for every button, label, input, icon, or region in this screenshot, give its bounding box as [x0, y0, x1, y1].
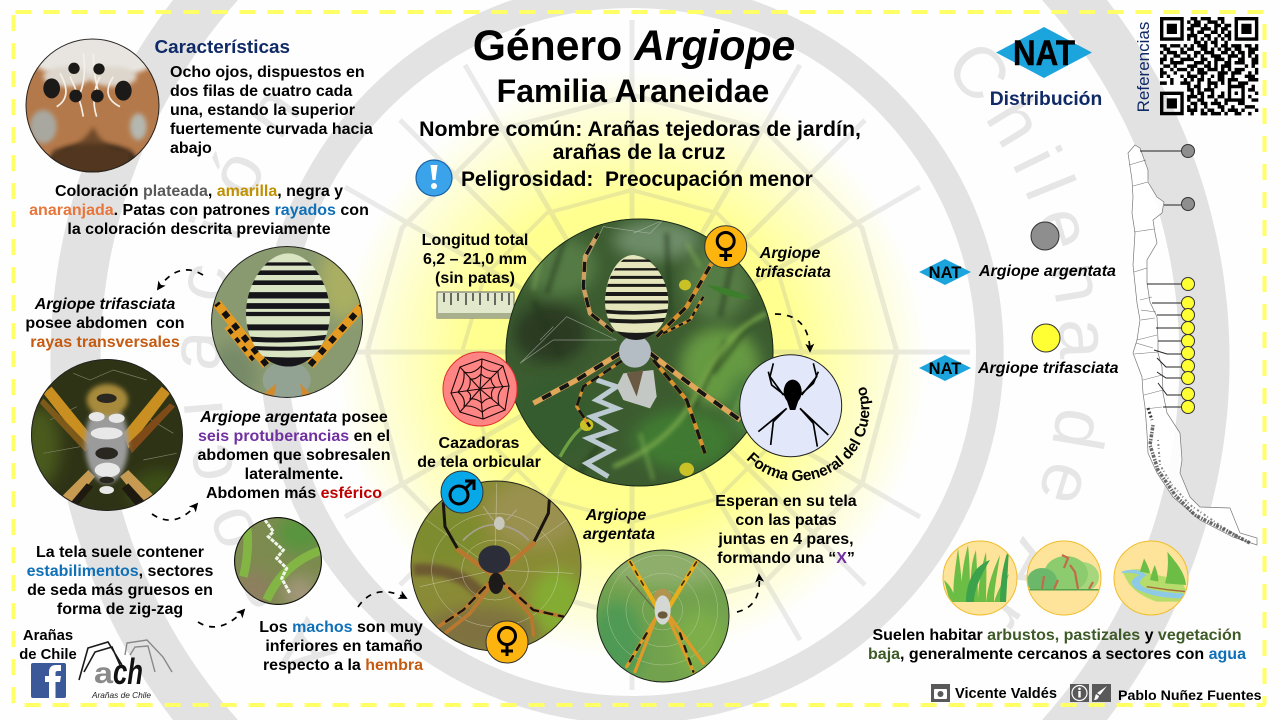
logo: arañas de chile: Arañas de Chile — [91, 691, 152, 700]
legend: argentata: NAT — [929, 264, 961, 282]
photo: argentata abdomen — [31, 359, 183, 511]
text: hunting mode — [417, 435, 541, 471]
text: eyes: dos filas de cuatro cada — [170, 83, 352, 100]
text: stabilimenta — [27, 544, 213, 618]
text: stabilimenta: de seda más gruesos en — [27, 582, 213, 599]
text: trifasciata — [25, 296, 185, 351]
label: trifasciata species: Argiope — [759, 245, 820, 262]
arrow — [198, 610, 244, 627]
references label: Referencias — [1134, 22, 1153, 112]
arrow — [158, 270, 203, 289]
map of Chile — [1128, 145, 1257, 545]
legend: trifasciata — [919, 324, 1119, 381]
arrow — [152, 504, 197, 520]
photo: eyes — [26, 38, 160, 172]
text: argentata: seis protuberancias en el — [198, 428, 390, 445]
logo: arañas de chile — [79, 640, 172, 700]
distribution points: trifasciata — [1147, 278, 1194, 414]
icon: facebook — [31, 663, 66, 698]
text: colouration: la coloración descrita previamente — [67, 221, 331, 238]
text: habitat: Suelen habitar arbustos, pastizales y vegetación — [872, 627, 1242, 644]
text: eyes: fuertemente curvada hacia — [170, 121, 373, 138]
icon: danger info — [416, 160, 452, 196]
label: argentata species: argentata — [583, 526, 655, 543]
text: waiting posture — [715, 493, 857, 567]
text: males — [259, 619, 423, 674]
icon: brush — [1092, 684, 1111, 702]
text: stabilimenta: La tela suele contener — [36, 544, 204, 561]
legend: trifasciata: Argiope trifasciata — [977, 360, 1119, 377]
icon: river — [1114, 541, 1188, 615]
distribution points: argentata — [1140, 144, 1194, 210]
text: stabilimenta: estabilimentos, sectores — [27, 563, 213, 580]
text: trifasciata: posee abdomen con — [25, 315, 185, 332]
text: colouration — [29, 183, 369, 238]
illustration credit: Pablo Nuñez Fuentes — [1118, 688, 1262, 704]
common name: Nombre común: Arañas tejedoras de jardín, — [419, 117, 861, 141]
text: argentata: lateralmente. — [245, 466, 343, 483]
heading: distribution: Distribución — [990, 89, 1102, 110]
icon: female symbol — [705, 226, 747, 268]
text: waiting posture: con las patas — [735, 512, 837, 529]
photo: trifasciata abdomen — [211, 246, 363, 398]
heading: characteristics: Características — [154, 37, 290, 58]
label: argentata species — [583, 507, 655, 543]
icon: web — [443, 352, 517, 426]
photo: zigzag silk — [234, 517, 322, 605]
text: trifasciata: rayas transversales — [30, 334, 180, 351]
text: habitat — [868, 627, 1246, 663]
icon: shrub — [1025, 541, 1103, 616]
icon: body shape — [740, 355, 842, 457]
text: argentata — [198, 409, 390, 502]
watermark logo: Chilena de Ar — [954, 47, 1105, 630]
logo: arañas de chile: a — [94, 657, 113, 690]
text: eyes — [170, 64, 373, 157]
text: trifasciata: Argiope trifasciata — [34, 296, 175, 313]
text: total length: Longitud total — [422, 232, 528, 249]
icon: camera — [931, 684, 950, 702]
text: eyes: abajo — [170, 140, 212, 157]
common name — [419, 117, 861, 164]
text: argentata: abdomen que sobresalen — [198, 447, 390, 464]
legend: argentata — [919, 222, 1116, 285]
label: trifasciata species — [755, 245, 831, 281]
text: males: respecto a la hembra — [263, 657, 423, 674]
text: eyes: Ocho ojos, dispuestos en — [170, 64, 365, 81]
danger level: Peligrosidad: Preocupación menor — [461, 168, 813, 191]
arrow — [737, 575, 759, 612]
text: total length: 6,2 – 21,0 mm — [423, 251, 527, 268]
text: hunting mode: Cazadoras — [439, 435, 520, 452]
icon: ruler — [437, 292, 514, 318]
common name: arañas de la cruz — [553, 140, 725, 164]
icon: female symbol — [486, 621, 528, 663]
label: argentata species: Argiope — [585, 507, 646, 524]
yellow glow — [300, 40, 960, 700]
photo: male and female argentata — [407, 477, 587, 657]
icon: male symbol — [441, 471, 483, 513]
label: trifasciata species: trifasciata — [755, 264, 831, 281]
photo credit: Vicente Valdés — [955, 686, 1057, 702]
text: hunting mode: de tela orbicular — [417, 454, 541, 471]
photo: argentata on web — [596, 550, 730, 682]
title: Género Argiope — [473, 22, 795, 70]
icon: grass — [943, 541, 1017, 615]
text: argentata: Argiope argentata posee — [199, 409, 388, 426]
text: colouration: anaranjada. Patas con patrones rayados con — [29, 202, 369, 219]
facebook page label — [19, 628, 77, 663]
text: waiting posture: Esperan en su tela — [715, 493, 857, 510]
text: total length: (sin patas) — [435, 270, 515, 287]
icon: NAT distribution: NAT — [1013, 34, 1075, 73]
text: total length — [422, 232, 528, 287]
facebook page label: de Chile — [19, 647, 77, 663]
legend: argentata: Argiope argentata — [978, 263, 1116, 280]
arrow — [358, 592, 406, 607]
curved caption: body shape: Forma General del Cuerpo — [746, 387, 872, 481]
QR code — [1160, 17, 1258, 115]
facebook page label: Arañas — [23, 628, 73, 644]
text: males: inferiores en tamaño — [265, 638, 423, 655]
logo: arañas de chile: ch — [113, 651, 143, 692]
legend: trifasciata: NAT — [929, 360, 961, 378]
text: eyes: una, estando la superior — [170, 102, 355, 119]
text: waiting posture: formando una “X” — [717, 550, 855, 567]
icon: info — [1070, 684, 1089, 702]
text: stabilimenta: forma de zig-zag — [57, 601, 183, 618]
text: males: Los machos son muy — [259, 619, 423, 636]
watermark logo: Asociación — [181, 94, 336, 668]
text: waiting posture: juntas en 4 pares, — [717, 531, 854, 548]
title — [473, 22, 795, 109]
text: argentata: Abdomen más esférico — [206, 485, 382, 502]
text: colouration: Coloración plateada, amarilla, negra y — [55, 183, 343, 200]
photo: main female trifasciata — [503, 217, 777, 490]
title: Familia Araneidae — [497, 73, 769, 109]
text: habitat: baja, generalmente cercanos a sectores con agua — [868, 646, 1246, 663]
arrow — [775, 314, 810, 351]
icon: NAT distribution — [996, 27, 1092, 78]
